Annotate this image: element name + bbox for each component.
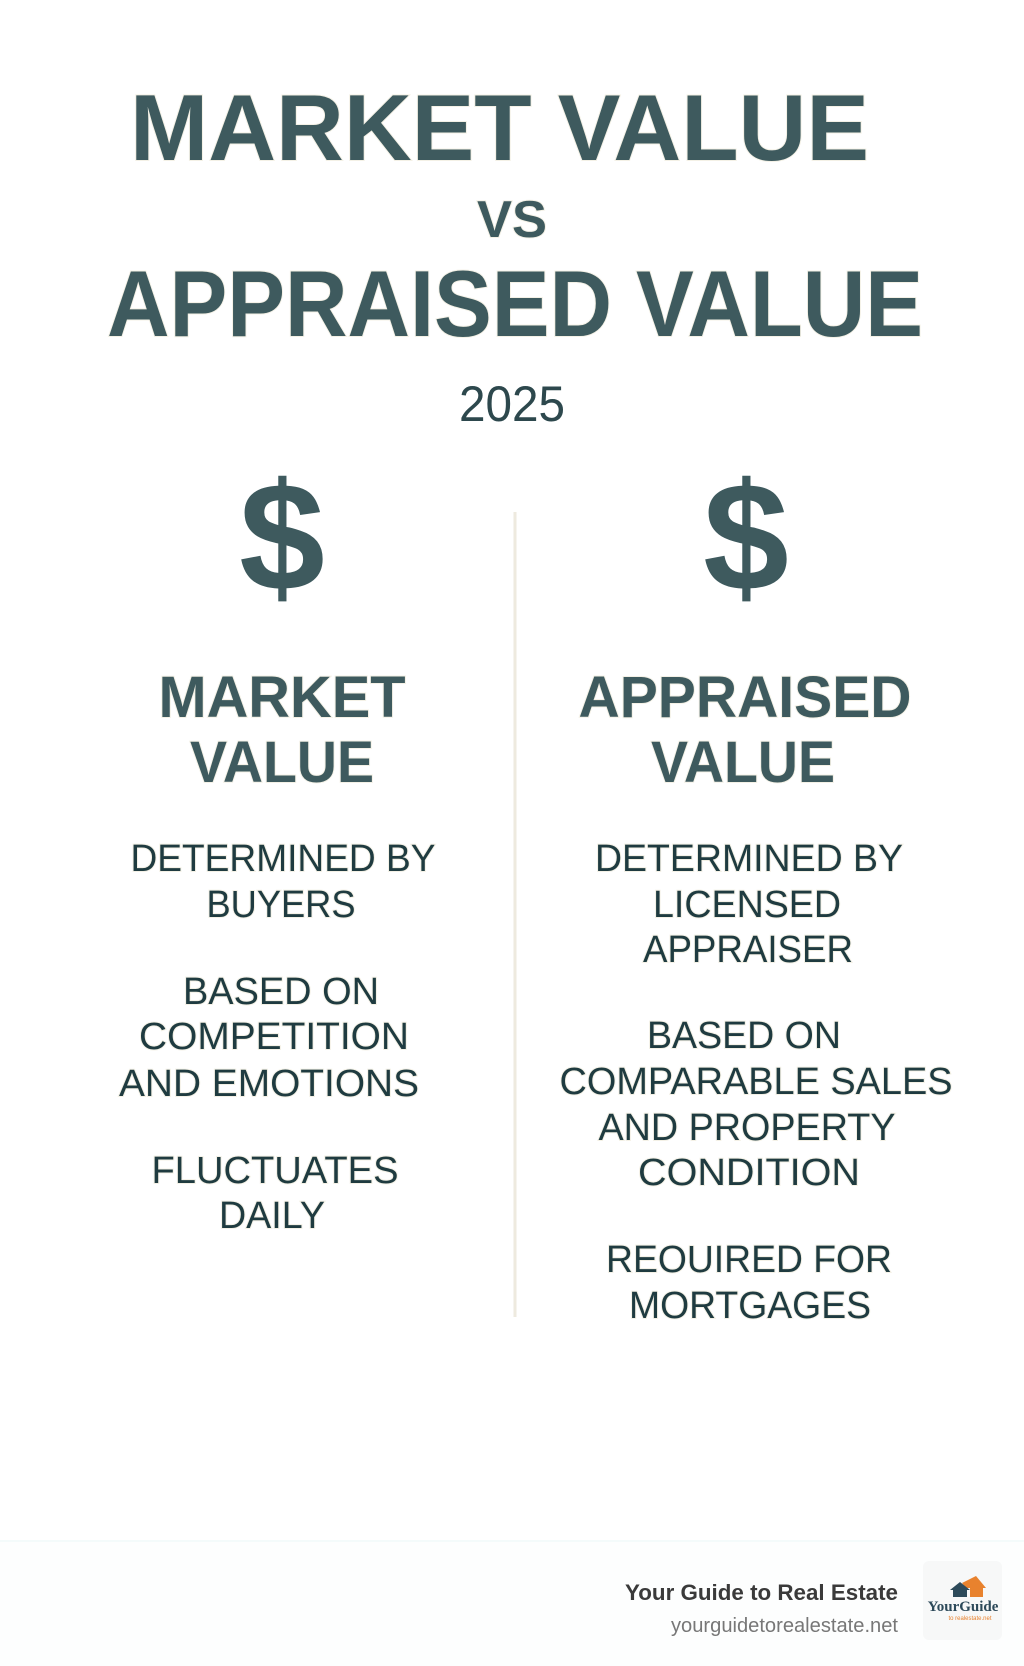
text block: appraised points: BASED ON — [647, 1015, 841, 1057]
icon: logo: to realestate.net — [948, 1616, 992, 1622]
text block: appraised points: COMPARABLE SALES — [560, 1061, 952, 1103]
heading: appraised value — [578, 665, 912, 795]
text block: market points: AND EMOTIONS — [119, 1063, 419, 1105]
heading: market value — [158, 665, 406, 795]
text block: market points — [119, 838, 436, 1237]
text block: appraised points: REOUIRED FOR — [606, 1239, 892, 1281]
text block: market points: DAILY — [219, 1195, 325, 1237]
title: APPRAISED VALUE — [107, 251, 923, 356]
text block: appraised points: DETERMINED BY — [595, 838, 903, 880]
text block: appraised points — [560, 838, 952, 1327]
text block: market points: COMPETITION — [139, 1016, 409, 1058]
heading: appraised value: VALUE — [651, 730, 835, 795]
icon: dollar left: $ — [239, 451, 325, 623]
subtitle year: 2025 — [459, 376, 565, 432]
text block: appraised points: CONDITION — [638, 1152, 860, 1194]
text block: appraised points: AND PROPERTY — [598, 1107, 896, 1149]
title: MARKET VALUE — [130, 75, 869, 180]
footer brand name: Your Guide to Real Estate — [625, 1580, 898, 1605]
footer url: yourguidetorealestate.net — [671, 1615, 898, 1637]
divider — [514, 512, 516, 1317]
panel: market value — [119, 451, 436, 1237]
title — [107, 75, 923, 356]
text block: market points: FLUCTUATES — [152, 1150, 398, 1192]
icon: logo — [923, 1561, 1002, 1640]
footer — [0, 1541, 1024, 1666]
text block: market points: BUYERS — [206, 884, 356, 926]
icon: dollar right: $ — [703, 451, 789, 623]
text block: market points: BASED ON — [183, 971, 379, 1013]
panel: appraised value — [560, 451, 952, 1327]
heading: market value: VALUE — [190, 730, 374, 795]
text block: market points: DETERMINED BY — [130, 838, 436, 880]
heading: appraised value: APPRAISED — [578, 665, 912, 730]
icon: logo: YourGuide — [928, 1599, 999, 1615]
title: VS — [477, 191, 547, 249]
text block: appraised points: MORTGAGES — [629, 1285, 871, 1327]
heading: market value: MARKET — [158, 665, 406, 730]
text block: appraised points: LICENSED — [653, 884, 841, 926]
text block: appraised points: APPRAISER — [643, 929, 853, 971]
